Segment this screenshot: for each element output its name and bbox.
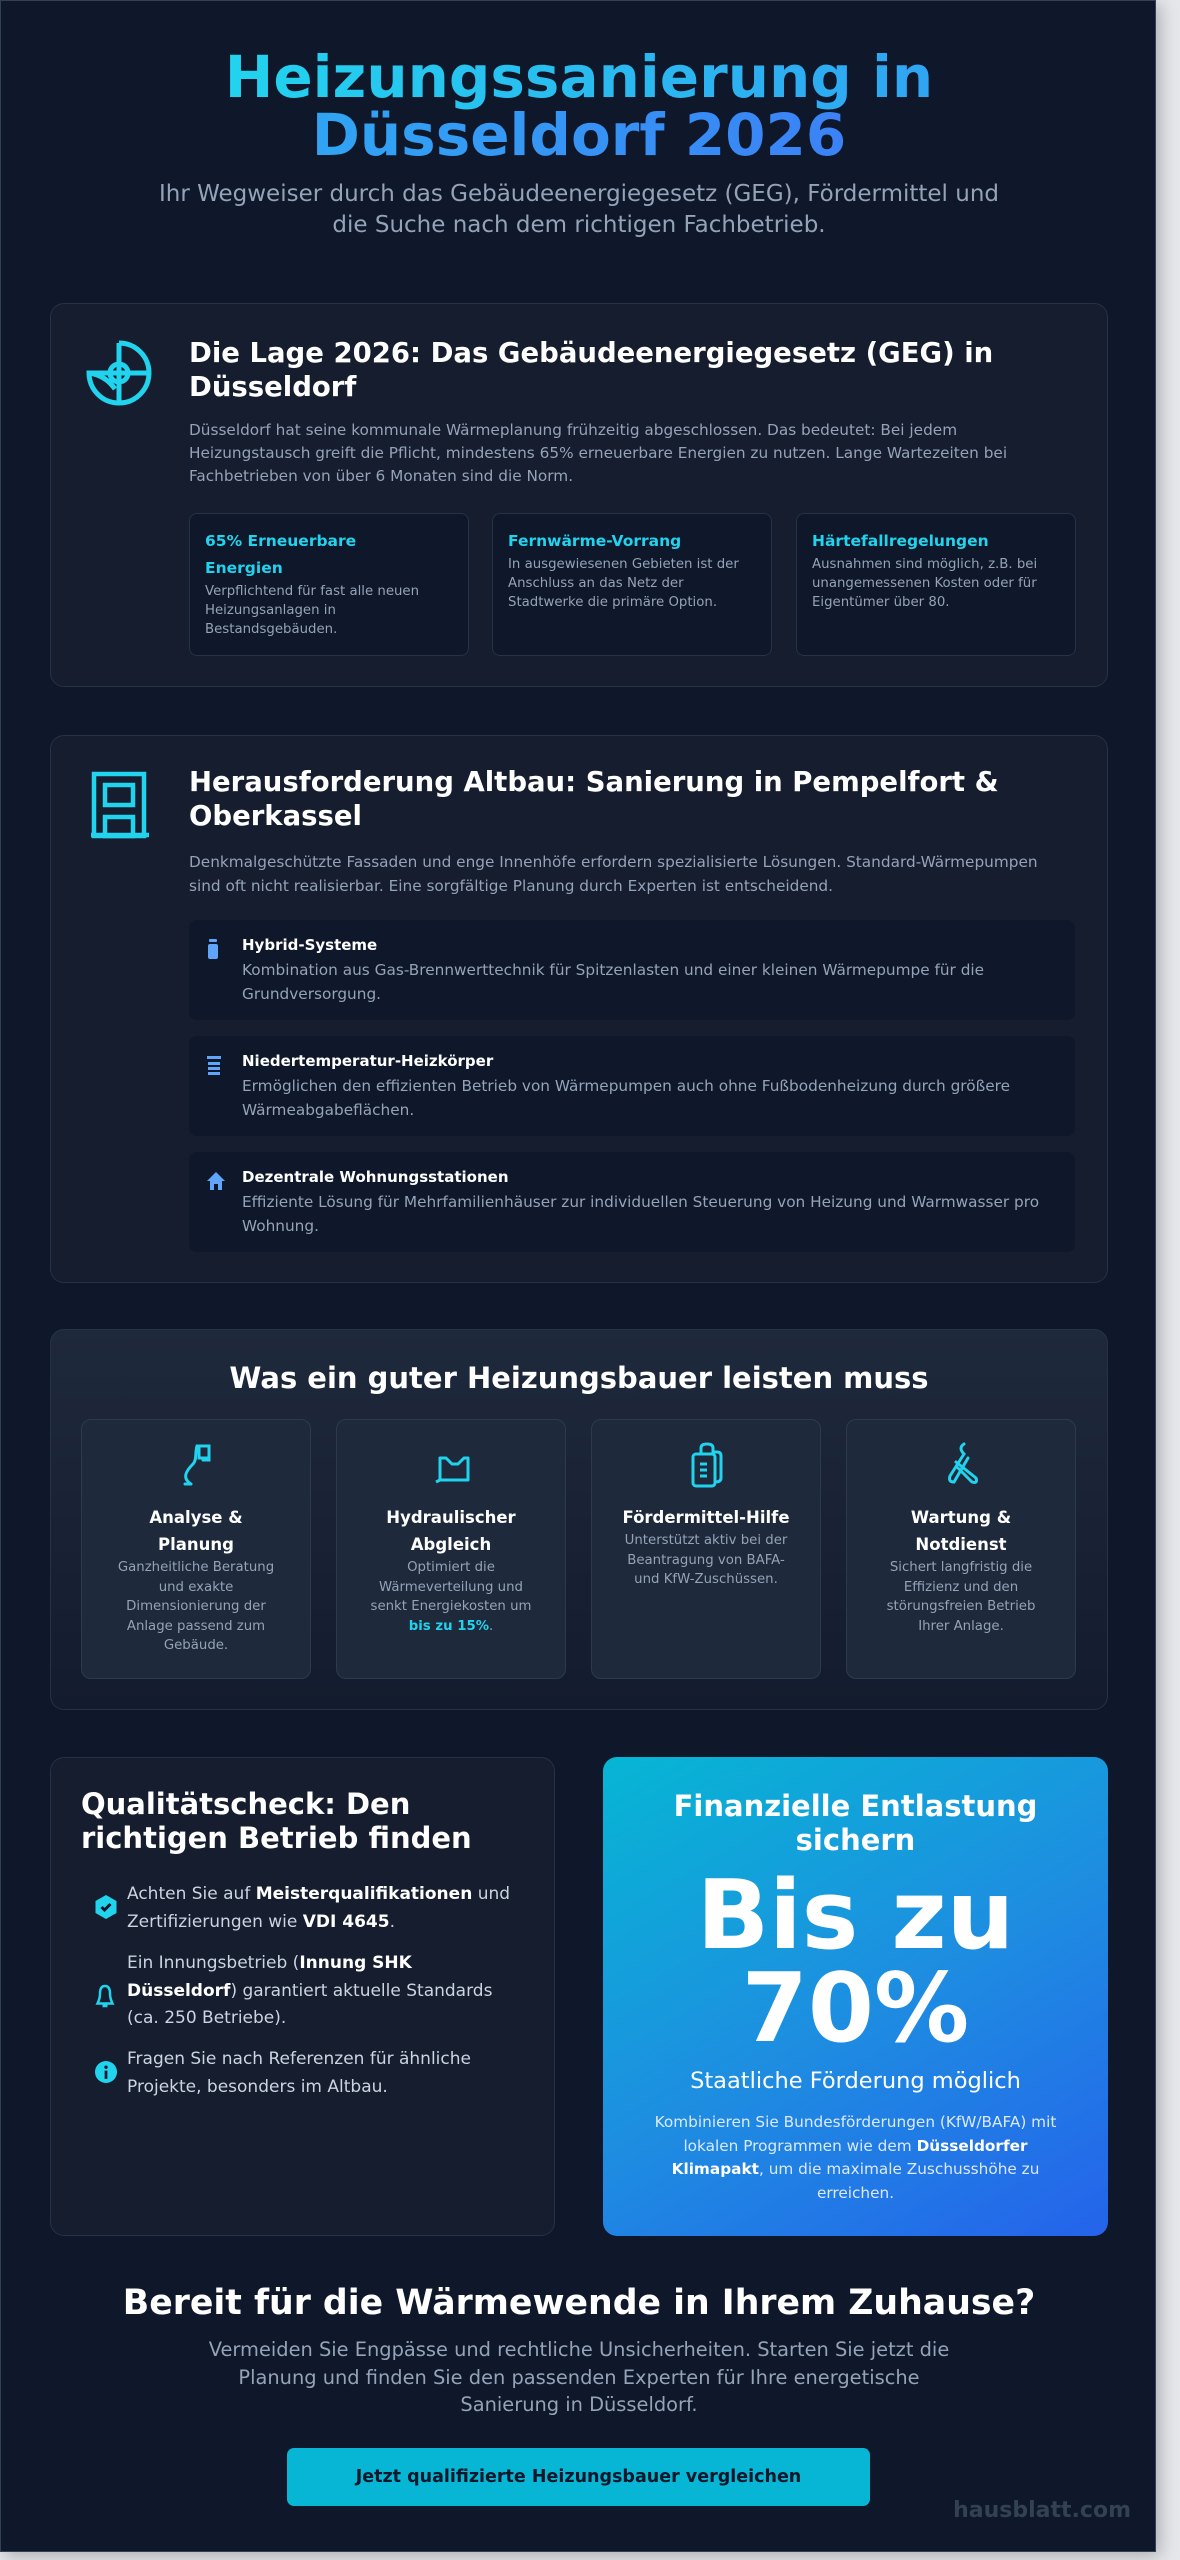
- card: Härtefall: [796, 513, 1076, 656]
- heading: Finanzielle Entlastung: [674, 1789, 1037, 1857]
- card: 65%: Bestandsgebäuden.: [205, 622, 337, 637]
- card: Fernwärme: Anschluss an das Netz der: [508, 576, 684, 591]
- card: Härtefall: Ausnahmen sind möglich, z.B. bei: [812, 557, 1037, 572]
- heading: Finanzielle Entlastung: sichern: [796, 1823, 915, 1857]
- text: CTA: Planung und finden Sie den passenden Experten für Ihre energetische: [238, 2366, 920, 2388]
- card: Analyse: Anlage passend zum: [127, 1618, 265, 1634]
- title: Düsseldorf 2026: [312, 101, 846, 169]
- item: Niedertemperatur: Niedertemperatur-Heizkörper: [242, 1052, 493, 1070]
- card: Wartung: [846, 1419, 1076, 1679]
- heading: Qualitätscheck: richtigen Betrieb finden: [81, 1821, 472, 1855]
- heading: GEG: Düsseldorf: [189, 371, 356, 403]
- button: CTA: [287, 2448, 870, 2506]
- title: [225, 43, 933, 169]
- card: Wartung: Ihrer Anlage.: [918, 1618, 1004, 1634]
- card: Analyse: Gebäude.: [164, 1638, 228, 1653]
- subtitle: die Suche nach dem richtigen Fachbetrieb.: [332, 212, 826, 238]
- panel: GEG situation: [50, 303, 1108, 687]
- item: Wohnungsstationen: [189, 1152, 1075, 1252]
- card: Wartung: störungsfreien Betrieb: [887, 1599, 1035, 1614]
- card: Wartung: Sichert langfristig die: [890, 1560, 1032, 1575]
- card: Abgleich: Abgleich: [411, 1535, 491, 1554]
- panel: Heizungsbauer: [50, 1329, 1108, 1710]
- subtitle: Ihr Wegweiser durch das Gebäudeenergiegesetz (GEG), Fördermittel und: [159, 181, 999, 207]
- heading: Altbau: Oberkassel: [189, 800, 362, 832]
- check item 2: Düsseldorf) garantiert aktuelle Standards: [127, 1980, 492, 2000]
- card: Abgleich: Hydraulischer: [386, 1508, 516, 1527]
- text: CTA: Vermeiden Sie Engpässe und rechtliche Unsicherheiten. Starten Sie jetzt die: [209, 2338, 949, 2361]
- panel: Qualitätscheck: [50, 1757, 555, 2236]
- card: Analyse: und exakte: [159, 1580, 233, 1594]
- item: Hybrid: [189, 920, 1075, 1020]
- heading: CTA: Bereit für die Wärmewende in Ihrem Zuhause?: [123, 2283, 1035, 2323]
- panel: Altbau: [50, 735, 1108, 1283]
- icon: building: [91, 772, 149, 838]
- card: Wartung: Notdienst: [915, 1535, 1007, 1554]
- item: Niedertemperatur: Wärmeabgabeflächen.: [242, 1101, 414, 1119]
- card: Härtefall: Eigentümer über 80.: [812, 595, 950, 610]
- heading: Altbau: Herausforderung Altbau: Sanierung in Pempelfort &: [189, 766, 999, 798]
- heading: Qualitätscheck: Qualitätscheck: Den: [81, 1787, 410, 1821]
- card: Härtefall: unangemessenen Kosten oder für: [812, 576, 1037, 591]
- text: Altbau intro: [189, 853, 1038, 895]
- check item 3: [95, 2049, 471, 2096]
- heading: Finanzielle Entlastung: Finanzielle Entlastung: [674, 1789, 1037, 1823]
- card: Abgleich: bis zu 15%.: [409, 1618, 493, 1634]
- title: Heizungssanierung in: [225, 43, 933, 111]
- card: Fördermittel: und KfW-Zuschüssen.: [634, 1572, 778, 1587]
- big number: [697, 1861, 1014, 2064]
- card: 65%: Energien: [205, 559, 283, 577]
- text: Förderung description: erreichen.: [817, 2184, 894, 2202]
- card: Abgleich: senkt Energiekosten um: [371, 1599, 531, 1614]
- card: Abgleich: Wärmeverteilung und: [379, 1580, 523, 1594]
- text: GEG intro: Heizungstausch greift die Pflicht, mindestens 65% erneuerbare Energien zu nutzen. Lange Wartezeiten bei: [189, 444, 1007, 462]
- check item 2: [96, 1953, 492, 2028]
- card: 65%: 65% Erneuerbare: [205, 532, 356, 550]
- card: Analyse: Planung: [158, 1535, 234, 1554]
- card: Analyse: [81, 1419, 311, 1679]
- text: CTA: [209, 2338, 949, 2416]
- text: GEG intro: Düsseldorf hat seine kommunale Wärmeplanung frühzeitig abgeschlossen. Das bedeutet: Bei jedem: [189, 421, 957, 439]
- card: 65%: [189, 513, 469, 656]
- item: Niedertemperatur: Ermöglichen den effizienten Betrieb von Wärmepumpen auch ohne Fußbodenheizung durch größere: [242, 1077, 1010, 1095]
- card: Fördermittel: Unterstützt aktiv bei der: [625, 1533, 787, 1548]
- text: Altbau intro: sind oft nicht realisierbar. Eine sorgfältige Planung durch Experten ist entscheidend.: [189, 877, 833, 895]
- big number: 70%: [742, 1954, 969, 2064]
- check item 3: Fragen Sie nach Referenzen für ähnliche: [127, 2049, 471, 2069]
- check item 1: [96, 1884, 510, 1932]
- card: Fördermittel: [591, 1419, 821, 1679]
- text: Förderung description: Kombinieren Sie Bundesförderungen (KfW/BAFA) mit: [655, 2113, 1056, 2131]
- card: Fördermittel: Fördermittel-Hilfe: [622, 1508, 790, 1527]
- panel: Förderung: [603, 1757, 1108, 2236]
- heading: GEG: [189, 337, 993, 403]
- item: Hybrid: Kombination aus Gas-Brennwerttechnik für Spitzenlasten und einer kleinen Wärmepumpe für die: [242, 961, 984, 979]
- item: Wohnungsstationen: Effiziente Lösung für Mehrfamilienhäuser zur individuellen Steuerung von Heizung und Warmwasser pro: [242, 1193, 1039, 1211]
- card: Analyse: Ganzheitliche Beratung: [118, 1560, 274, 1575]
- card: Härtefall: Härtefallregelungen: [812, 532, 989, 550]
- item: Wohnungsstationen: Wohnung.: [242, 1217, 319, 1235]
- card: Analyse: Dimensionierung der: [126, 1599, 266, 1614]
- item: Hybrid: Grundversorgung.: [242, 985, 381, 1003]
- text: Altbau intro: Denkmalgeschützte Fassaden und enge Innenhöfe erfordern spezialisierte Lösungen. Standard-Wärmepumpen: [189, 853, 1038, 871]
- card: Wartung: Wartung &: [911, 1508, 1011, 1527]
- check item 2: Ein Innungsbetrieb (Innung SHK: [127, 1953, 412, 1973]
- big number: Bis zu: [697, 1861, 1014, 1971]
- text: CTA: Sanierung in Düsseldorf.: [460, 2393, 698, 2416]
- card: Abgleich: [336, 1419, 566, 1679]
- item: Niedertemperatur: [189, 1036, 1075, 1136]
- card: Fernwärme: Stadtwerke die primäre Option.: [508, 595, 717, 610]
- item: Hybrid: Hybrid-Systeme: [242, 936, 377, 954]
- button: CTA: Jetzt qualifizierte Heizungsbauer vergleichen: [356, 2467, 801, 2487]
- card: Fernwärme: Fernwärme-Vorrang: [508, 532, 681, 550]
- heading: Heizungsbauer: Was ein guter Heizungsbauer leisten muss: [229, 1361, 929, 1395]
- check item 3: Projekte, besonders im Altbau.: [127, 2076, 388, 2096]
- subtitle: [159, 181, 999, 238]
- footer: brand: hausblatt.com: [953, 2498, 1131, 2523]
- item: Wohnungsstationen: Dezentrale Wohnungsstationen: [242, 1168, 508, 1186]
- text: Förderung description: lokalen Programmen wie dem Düsseldorfer: [683, 2136, 1028, 2154]
- card: Fördermittel: Beantragung von BAFA-: [627, 1552, 785, 1568]
- card: 65%: Verpflichtend für fast alle neuen: [205, 584, 419, 599]
- card: 65%: Heizungsanlagen in: [205, 603, 336, 618]
- icon: energy: [86, 340, 152, 406]
- text: Förderung description: Klimapakt, um die maximale Zuschusshöhe zu: [672, 2160, 1039, 2178]
- card: Wartung: Effizienz und den: [904, 1580, 1018, 1594]
- card: Fernwärme: [492, 513, 772, 656]
- check item 1: Zertifizierungen wie VDI 4645.: [127, 1912, 395, 1932]
- check item 1: Achten Sie auf Meisterqualifikationen und: [127, 1884, 510, 1904]
- check item 2: (ca. 250 Betriebe).: [127, 2008, 286, 2028]
- card: Fernwärme: In ausgewiesenen Gebieten ist der: [508, 557, 739, 572]
- heading: Qualitätscheck: [81, 1787, 472, 1855]
- text: Förderung description: [655, 2113, 1056, 2202]
- heading: GEG: Die Lage 2026: Das Gebäudeenergiegesetz (GEG) in: [189, 337, 993, 369]
- text: GEG intro: [189, 421, 1007, 485]
- text: GEG intro: Fachbetrieben von über 6 Monaten sind die Norm.: [189, 467, 573, 485]
- heading: Altbau: [189, 766, 999, 832]
- card: Abgleich: Optimiert die: [407, 1560, 495, 1575]
- text: Staatliche Förderung: Staatliche Förderung möglich: [690, 2068, 1021, 2094]
- card: Analyse: Analyse &: [149, 1508, 243, 1527]
